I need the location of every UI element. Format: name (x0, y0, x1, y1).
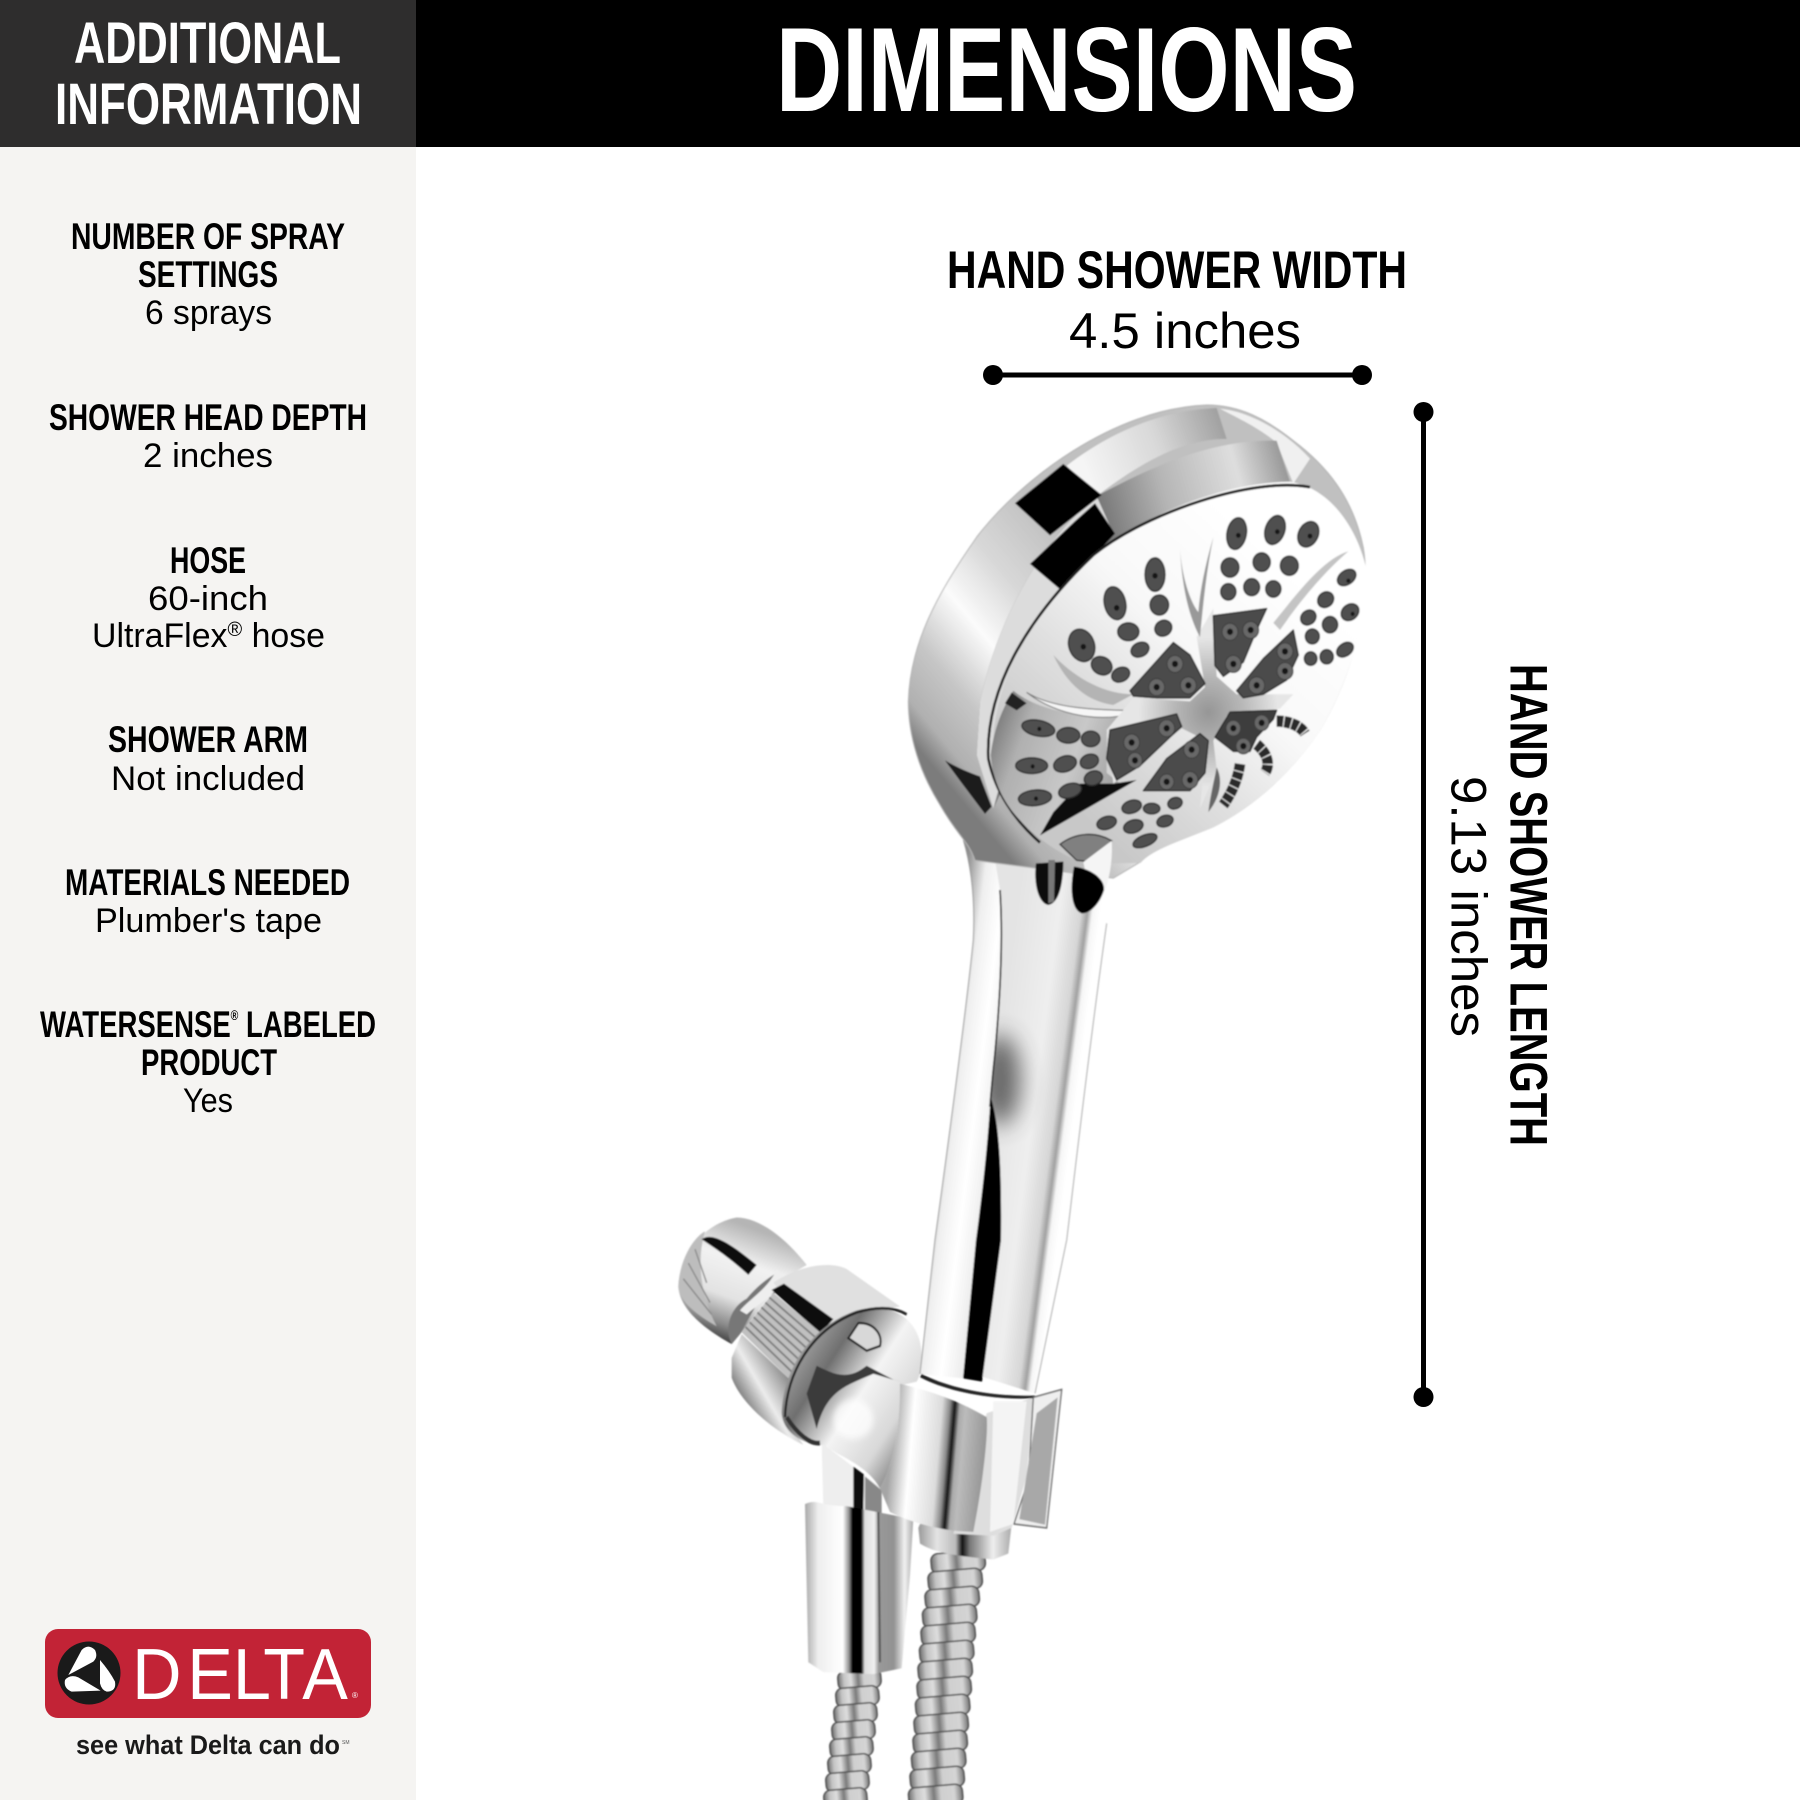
head top right highlight (1220, 409, 1310, 484)
clip (880, 1374, 1062, 1559)
spec: hose: HOSE (170, 540, 246, 581)
spec: watersense labeled product: WATERSENSE (40, 1004, 296, 1045)
arrow: length dimension line (1414, 402, 1434, 1407)
dimension label: hand shower length: 9.13 inches (1440, 776, 1496, 1037)
pad ray nozzles (1223, 721, 1305, 805)
nozzles (1016, 512, 1362, 851)
spec: hose: UltraFlex (92, 617, 228, 655)
spec: shower arm: Not included (111, 760, 305, 798)
six dark pads (1130, 642, 1205, 698)
spec: hose (92, 540, 325, 655)
sidebar header: additional information: ADDITIONAL (74, 11, 341, 76)
main header: dimensions: DIMENSIONS (776, 3, 1357, 137)
spec: hose: 60-inch (148, 580, 268, 618)
handle (919, 840, 1108, 1394)
dimension label: hand shower width: HAND SHOWER WIDTH (947, 241, 1407, 300)
spec: shower head depth: SHOWER HEAD DEPTH (49, 397, 367, 438)
panel: additional information sidebar background (0, 147, 416, 1800)
spec: shower head depth: 2 inches (143, 437, 273, 475)
shower head (908, 405, 1368, 909)
neck dark band (945, 760, 992, 814)
sidebar header: additional information (0, 0, 416, 147)
dimension label: hand shower width: 4.5 inches (1069, 303, 1301, 359)
spec: hose: hose (242, 617, 325, 655)
dimension label: hand shower length: HAND SHOWER LENGTH (1498, 664, 1558, 1146)
star centre (1107, 609, 1293, 809)
nozzle centre dots (1031, 529, 1355, 801)
spec: shower arm: SHOWER ARM (108, 719, 308, 760)
logo: delta (45, 1629, 371, 1760)
pad nozzle circles (1124, 621, 1293, 790)
head top band highlight (1067, 408, 1227, 496)
dimension label: hand shower width (947, 241, 1407, 359)
hoses (823, 1550, 986, 1800)
spec: watersense labeled product: LABELED (238, 1004, 376, 1045)
arm adapter (678, 1218, 922, 1674)
head body (908, 405, 1365, 878)
spec: watersense labeled product: ® (231, 1007, 239, 1023)
main header: dimensions (416, 0, 1800, 147)
logo: delta: SM (342, 1740, 350, 1746)
spec: materials needed (65, 862, 350, 940)
spec: watersense labeled product: PRODUCT (141, 1042, 277, 1083)
spec: number of spray settings: NUMBER OF SPRAY (71, 216, 345, 257)
dimension label: hand shower length (1440, 664, 1558, 1146)
logo: delta: see what Delta can do (76, 1730, 340, 1760)
logo: delta: DELTA (132, 1633, 348, 1714)
bottom lip (1060, 834, 1112, 862)
black reflection (1015, 464, 1102, 535)
spec: materials needed: Plumber's tape (95, 902, 322, 940)
spec: shower head depth (49, 397, 367, 475)
ring (977, 441, 1290, 809)
arrow: width dimension line (983, 365, 1372, 385)
silver lower left zone (991, 691, 1133, 837)
product: hand shower (678, 405, 1368, 1800)
spec: hose: ® (227, 619, 242, 641)
spec: number of spray settings (71, 216, 345, 332)
handle slots (1035, 860, 1104, 913)
logo: delta: ® (352, 1691, 358, 1700)
spec: watersense labeled product: Yes (183, 1082, 233, 1120)
spec: shower arm (108, 719, 308, 798)
spec: materials needed: MATERIALS NEEDED (65, 862, 350, 903)
spec: watersense labeled product (40, 1004, 376, 1120)
spec: number of spray settings: SETTINGS (138, 254, 278, 295)
face (993, 482, 1368, 864)
sidebar header: additional information: INFORMATION (55, 72, 362, 137)
spec: number of spray settings: 6 sprays (145, 294, 272, 332)
